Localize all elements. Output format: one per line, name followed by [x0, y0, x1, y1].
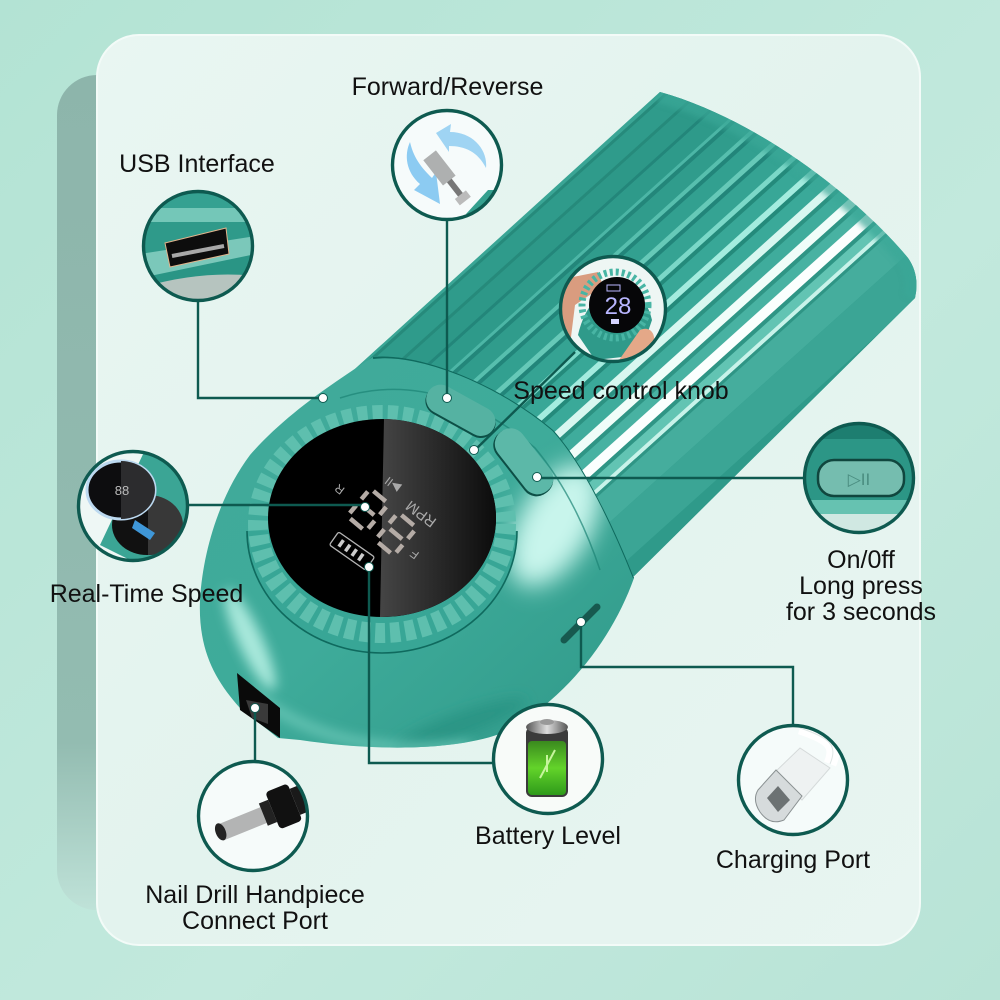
icon: dc plug — [214, 784, 306, 840]
charging slot — [564, 607, 597, 640]
outer collar ring — [247, 531, 517, 653]
connector dots — [250, 394, 586, 712]
battery indicator — [329, 532, 375, 570]
callout: Charging Port — [736, 724, 850, 838]
icon: rotation arrows — [436, 124, 486, 168]
callout: Handpiece port — [198, 761, 319, 873]
icon: usb-c plug — [772, 748, 830, 800]
callout: Battery Level — [492, 703, 604, 815]
mini display — [589, 277, 645, 333]
handpiece port — [237, 673, 280, 738]
callout: On/Off button — [804, 423, 914, 534]
callout: Real-Time Speed — [78, 450, 190, 565]
forward reverse button — [420, 379, 502, 443]
display screen — [268, 419, 496, 617]
device: nail drill — [200, 92, 916, 748]
label: Nail Drill Handpiece Connect Port — [145, 881, 365, 935]
screen labels: R — [332, 481, 347, 497]
callout: On/Off button: ▷II — [848, 470, 870, 489]
icon: battery — [526, 727, 568, 797]
label: Nail Drill Handpiece Connect Port: Nail Drill Handpiece — [145, 881, 365, 909]
screen labels: F — [407, 546, 422, 562]
panel: main card — [97, 35, 920, 945]
icon: cable — [800, 728, 833, 764]
device body with ribs — [355, 92, 916, 576]
screen labels: ▶II — [382, 474, 403, 495]
label: Charging Port: Charging Port — [716, 846, 870, 874]
callout: Speed control knob: 28 — [605, 293, 631, 320]
label: Forward/Reverse: Forward/Reverse — [352, 73, 543, 101]
icon: button — [818, 460, 904, 496]
icon: usb socket — [165, 228, 229, 267]
device head — [200, 356, 634, 748]
callout: Forward/Reverse — [390, 108, 505, 225]
fingers — [562, 272, 602, 338]
power button — [487, 422, 560, 502]
screen labels — [332, 474, 440, 562]
callout: Real-Time Speed: 88 — [115, 483, 129, 498]
label: Speed control knob: Speed control knob — [513, 377, 729, 405]
label: USB Interface: USB Interface — [119, 150, 275, 178]
label: On/Off: for 3 seconds — [786, 598, 936, 626]
label: On/Off: Long press — [799, 572, 923, 600]
speed digits — [347, 488, 417, 556]
label: Real-Time Speed: Real-Time Speed — [50, 580, 243, 608]
callout: USB Interface — [140, 190, 256, 305]
screen labels: RPM — [403, 497, 440, 530]
label: On/Off — [786, 546, 936, 626]
label: Nail Drill Handpiece Connect Port: Connect Port — [182, 907, 328, 935]
icon: drill bit — [423, 150, 472, 206]
label: Battery Level: Battery Level — [475, 822, 621, 850]
panel shadow — [57, 75, 457, 910]
callout: Speed control knob — [558, 254, 668, 365]
label: On/Off: On/0ff — [827, 546, 895, 574]
connector lines — [188, 219, 804, 763]
ribbed dial ring — [258, 415, 506, 633]
